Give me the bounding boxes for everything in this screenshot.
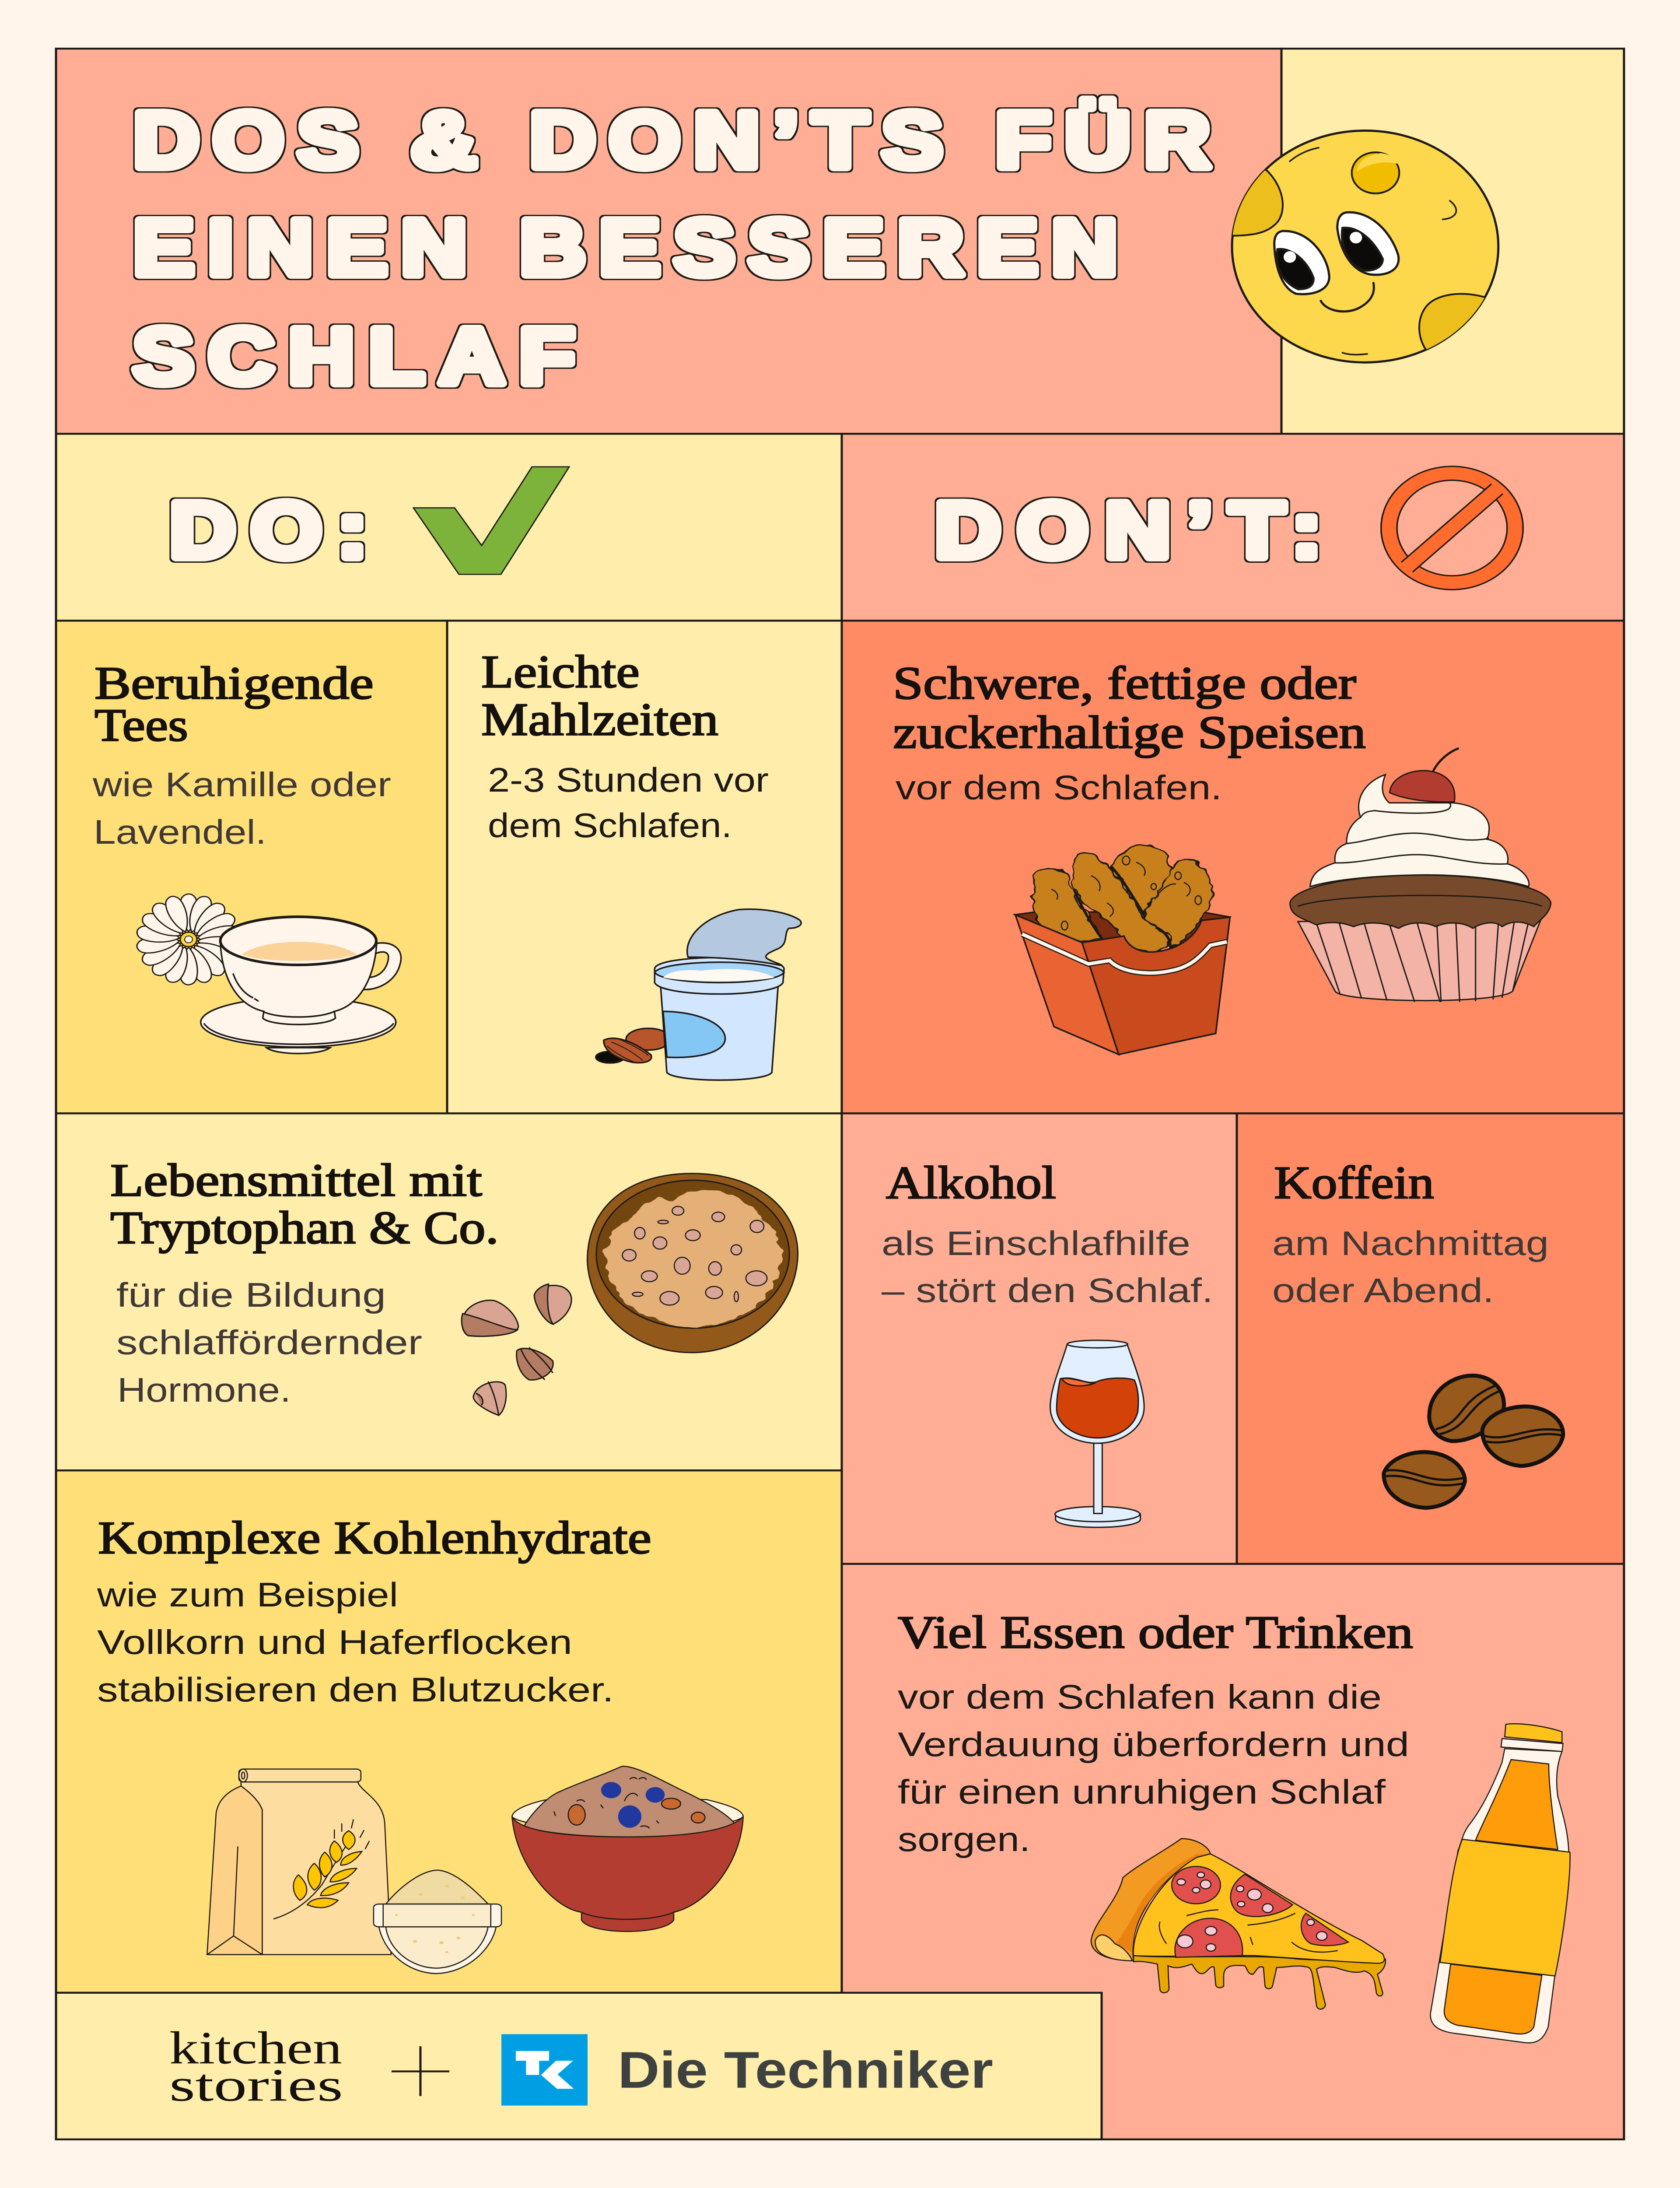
text: schlaffoerdernde hormone: für die Bildung	[116, 1276, 386, 1314]
text: kamille lavendel	[92, 765, 391, 851]
heading: leichte mahlzeiten: Leichte	[481, 646, 640, 697]
text: verdauung ueberfordern: vor dem Schlafen kann die	[898, 1678, 1382, 1716]
heading: schwere speisen: zuckerhaltige Speisen	[893, 707, 1366, 758]
heading: viel essen oder trinken: Viel Essen oder Trinken	[898, 1606, 1413, 1658]
text: verdauung ueberfordern: für einen unruhigen Schlaf	[898, 1773, 1386, 1811]
heading: koffein: Koffein	[1274, 1157, 1434, 1208]
heading: lebensmittel mit tryptophan: Lebensmittel mit	[110, 1154, 482, 1206]
icon: plus sign	[392, 2046, 449, 2096]
panel: complex carbohydrates	[56, 1470, 842, 1993]
icon: prohibition sign	[1389, 473, 1515, 583]
icon: chicken nuggets box	[1015, 844, 1230, 1055]
icon: yogurt and almonds	[596, 909, 801, 1080]
icon: green check mark	[413, 467, 569, 574]
heading: komplexe kohlenhydrate: Komplexe Kohlenhydrate	[98, 1512, 651, 1564]
panel: calming teas	[56, 621, 447, 1113]
heading: beruhigende tees: Beruhigende	[94, 657, 374, 709]
text: einschlafhilfe: – stört den Schlaf.	[882, 1271, 1213, 1309]
icon: red oatmeal bowl	[512, 1766, 743, 1932]
logo: kitchen stories	[169, 2022, 343, 2111]
text: verdauung ueberfordern: sorgen.	[898, 1820, 1030, 1858]
heading: beruhigende tees	[94, 657, 374, 751]
heading: title line 1: DOS & DON’TS FÜR	[133, 96, 1210, 184]
icon: bowl of nuts and loose seeds	[462, 1174, 798, 1415]
icon: smiling moon	[1221, 131, 1510, 362]
icon: wine glass	[1050, 1340, 1144, 1527]
heading: schwere speisen: Schwere, fettige oder	[893, 657, 1356, 709]
text: nachmittag abend	[1272, 1224, 1549, 1309]
logo: tk square	[501, 2034, 588, 2106]
text: schlaffoerdernde hormone: Hormone.	[117, 1371, 291, 1409]
text: einschlafhilfe	[882, 1224, 1213, 1309]
heading: leichte mahlzeiten: Mahlzeiten	[481, 694, 718, 745]
logo: kitchen stories: stories	[169, 2059, 343, 2111]
text: schlaffoerdernde hormone	[116, 1276, 422, 1409]
icon: coffee beans	[1384, 1375, 1563, 1508]
panel: caffeine	[1237, 1113, 1624, 1564]
text: verdauung ueberfordern	[898, 1678, 1409, 1858]
icon: flour bag with wheat	[207, 1769, 391, 1955]
icon: juice bottle	[1431, 1724, 1570, 2043]
heading: lebensmittel mit tryptophan	[110, 1154, 499, 1253]
icon: daisy flower	[136, 894, 242, 985]
logo: die techniker: Die Techniker	[618, 2041, 993, 2099]
text: nachmittag abend: oder Abend.	[1272, 1271, 1494, 1309]
panel: do header	[56, 434, 842, 621]
panel: tryptophan foods	[56, 1113, 842, 1470]
panel: footer logos	[56, 1993, 1102, 2139]
panel: alcohol	[842, 1113, 1237, 1564]
heading: beruhigende tees: Tees	[94, 699, 188, 751]
heading: title line 2: EINEN BESSEREN	[133, 203, 1117, 292]
heading: lebensmittel mit tryptophan: Tryptophan & Co.	[110, 1202, 499, 1253]
text: kamille lavendel: Lavendel.	[94, 813, 266, 851]
panel: heavy foods	[842, 621, 1624, 1113]
text: 2-3 stunden: 2-3 Stunden vor	[488, 761, 769, 799]
text: vollkorn und haferflocken	[97, 1576, 614, 1709]
text: vollkorn und haferflocken: wie zum Beispiel	[97, 1576, 398, 1614]
text: verdauung ueberfordern: Verdauung überfordern und	[898, 1725, 1409, 1764]
heading: do: DO:	[170, 486, 368, 574]
heading: title line 3: SCHLAF	[133, 312, 575, 400]
heading: alkohol: Alkohol	[886, 1157, 1056, 1208]
panel: light meals	[447, 621, 842, 1113]
text: schlaffoerdernde hormone: schlaffördernder	[116, 1323, 422, 1361]
text: kamille lavendel: wie Kamille oder	[92, 765, 391, 803]
text: vollkorn und haferflocken: Vollkorn und Haferflocken	[97, 1623, 572, 1661]
heading: don't: DON’T:	[935, 486, 1322, 574]
text: nachmittag abend: am Nachmittag	[1272, 1224, 1549, 1262]
text: 2-3 stunden: dem Schlafen.	[488, 806, 732, 845]
logo: kitchen stories: kitchen	[169, 2022, 342, 2073]
icon: tea cup and saucer	[201, 917, 401, 1054]
heading: schwere speisen	[893, 657, 1366, 758]
text: einschlafhilfe: als Einschlafhilfe	[882, 1224, 1190, 1262]
panel: don't header	[842, 434, 1624, 621]
panel: title	[56, 49, 1624, 434]
text: vollkorn und haferflocken: stabilisieren den Blutzucker.	[97, 1671, 614, 1709]
text: 2-3 stunden	[488, 761, 769, 845]
icon: cupcake with cherry	[1290, 749, 1551, 1002]
heading: leichte mahlzeiten	[481, 646, 718, 745]
panel: too much food or drink	[842, 1564, 1624, 2139]
text: vor dem schlafen: vor dem Schlafen.	[896, 768, 1222, 806]
icon: small bowl of oat flour	[374, 1870, 501, 1974]
icon: pizza slice	[1091, 1839, 1386, 2009]
